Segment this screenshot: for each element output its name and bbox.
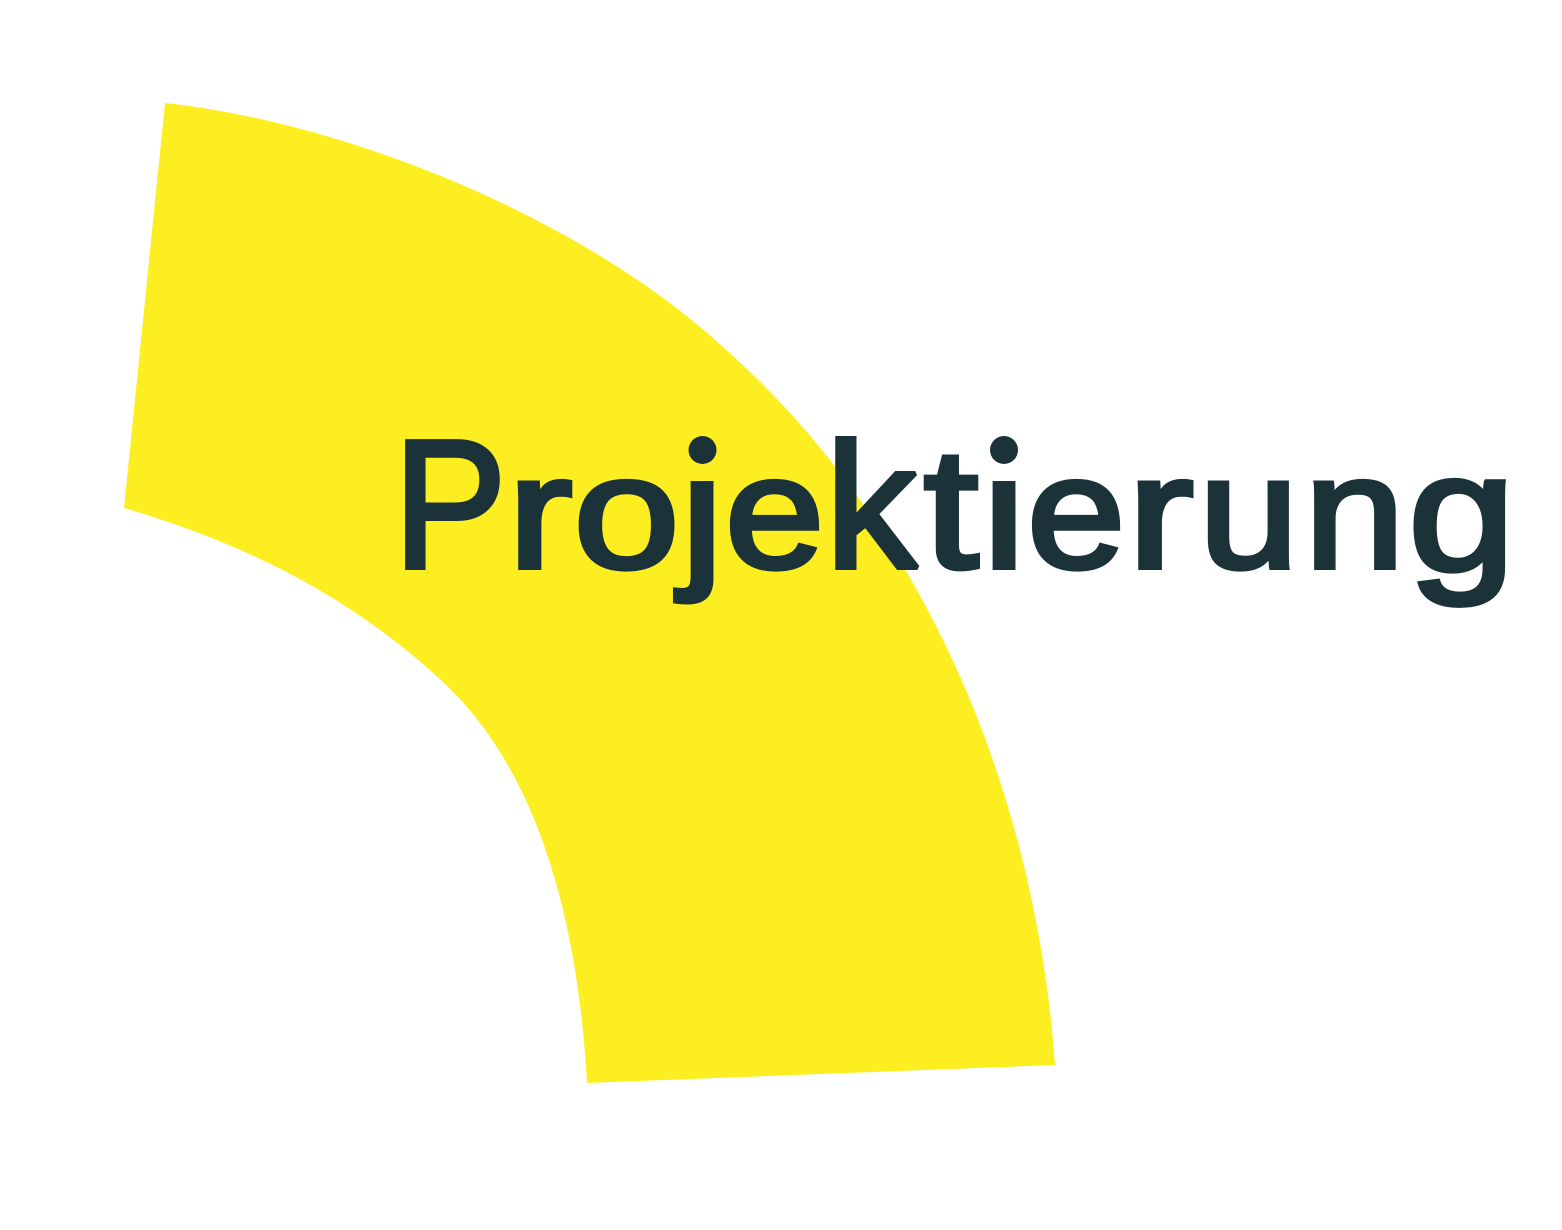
title: Projektierung — [405, 436, 1506, 608]
yellow curved arc band — [124, 103, 1055, 1083]
title: Projektierung: r — [1128, 422, 1194, 602]
title: Projektierung: o — [574, 422, 680, 602]
title: Projektierung: e — [1027, 422, 1125, 602]
title: Projektierung: j — [675, 418, 724, 604]
title: Projektierung: t — [924, 414, 979, 604]
title: Projektierung: i — [983, 418, 1026, 604]
title: Projektierung: n — [1304, 422, 1404, 602]
title: Projektierung: P — [394, 402, 506, 606]
title: Projektierung: g — [1408, 418, 1515, 606]
title: Projektierung: k — [826, 406, 918, 606]
title: Projektierung: e — [725, 422, 824, 602]
title: Projektierung: r — [508, 422, 572, 602]
title: Projektierung: u — [1199, 422, 1298, 602]
